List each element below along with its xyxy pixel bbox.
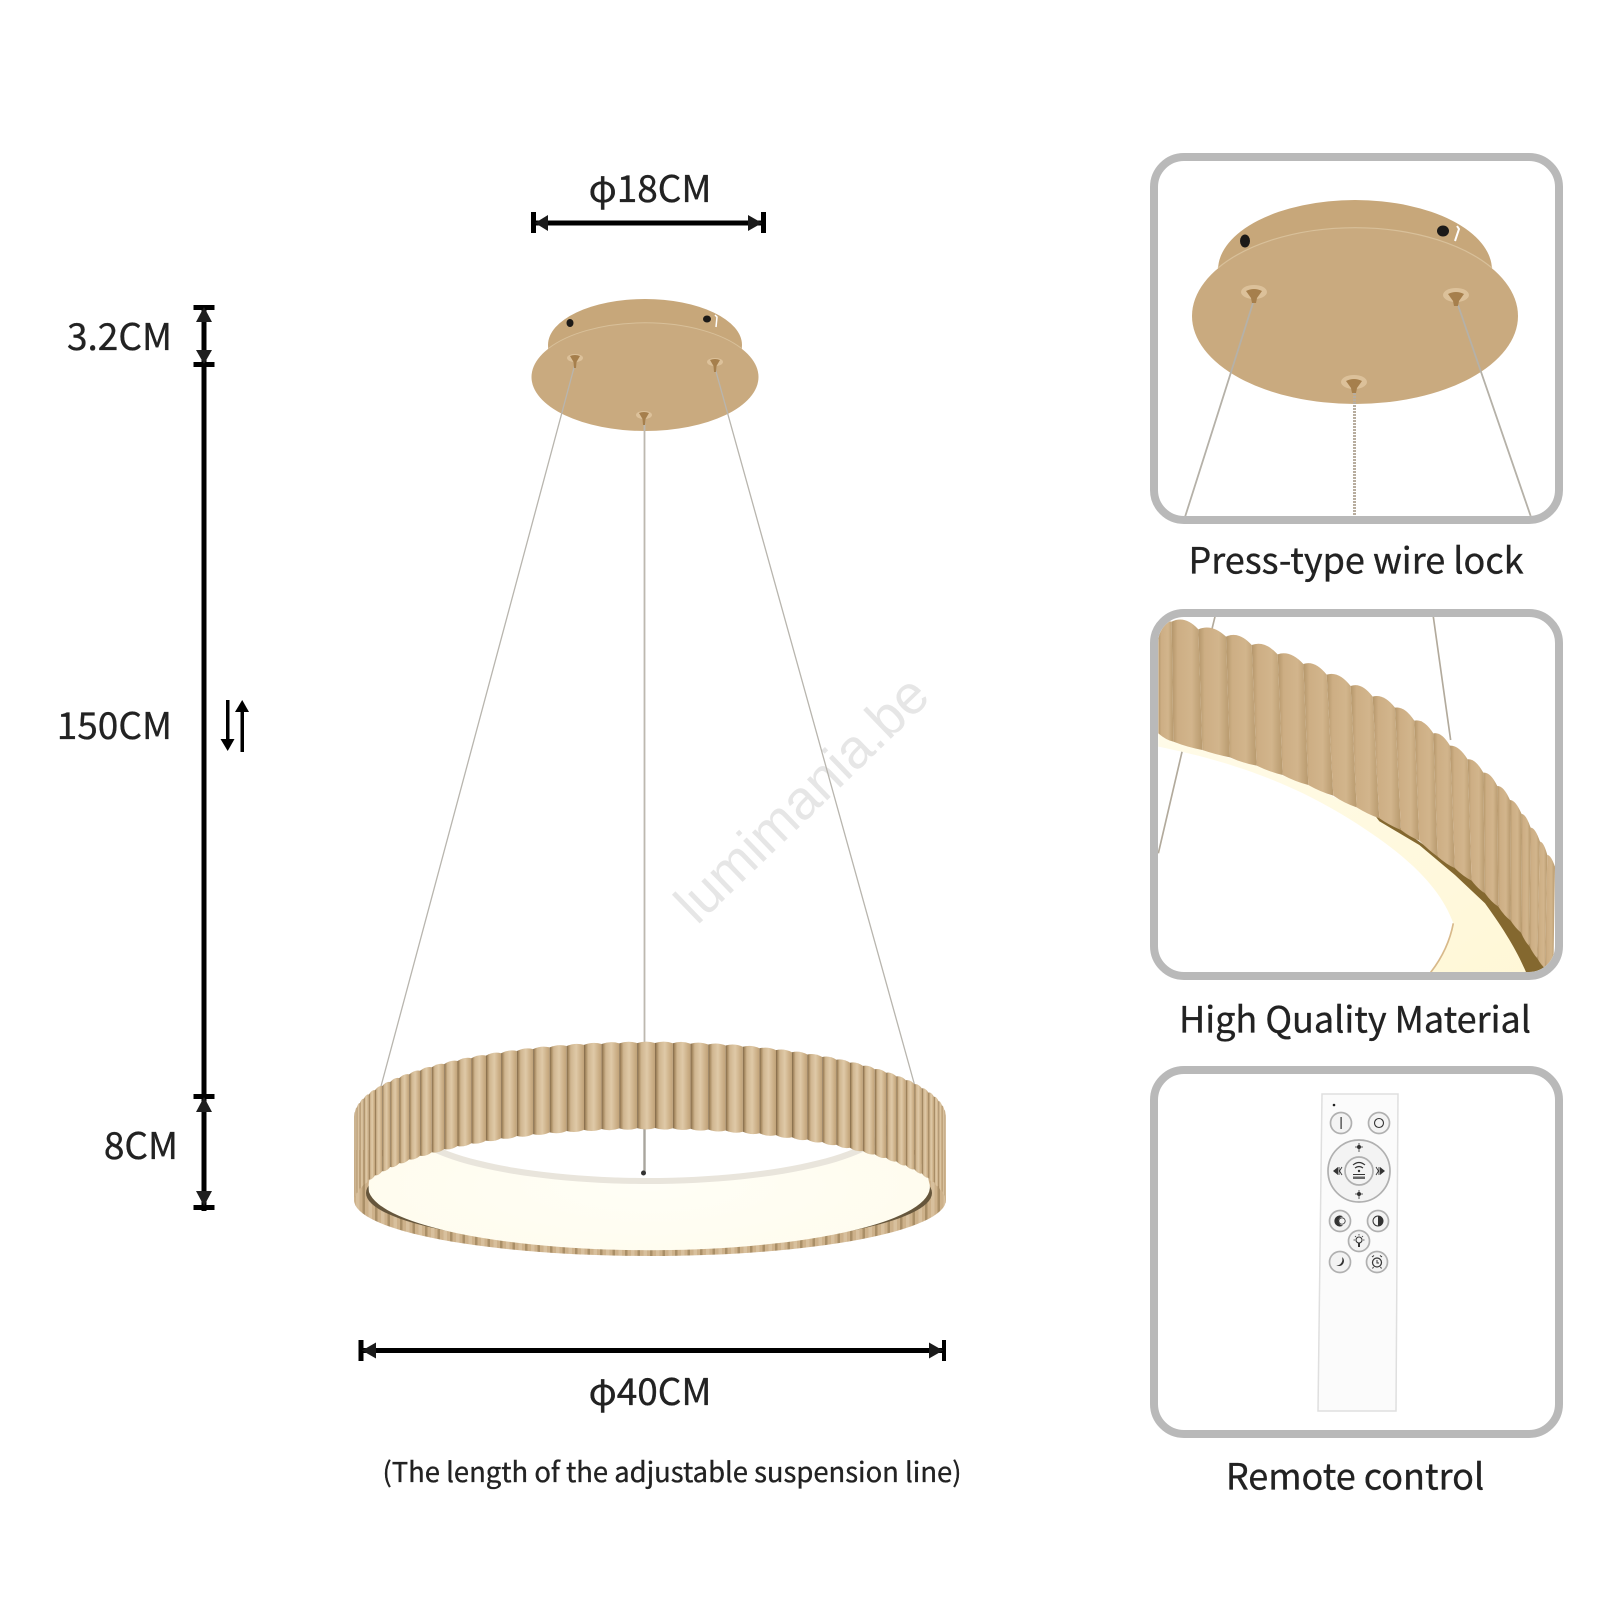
dimension: vertical scale <box>194 305 214 1211</box>
dark inner rim <box>366 1139 932 1247</box>
remote handset <box>1318 1094 1398 1411</box>
watermark: lumimania.be <box>662 663 941 935</box>
label: band height: 8CM <box>104 1116 178 1170</box>
caption: press-type wire lock: Press-type wire lock <box>1188 532 1524 584</box>
icon: adjustable arrows <box>220 700 249 752</box>
close-up canopy <box>1185 200 1531 517</box>
caption: high quality material: High Quality Material <box>1179 992 1531 1044</box>
inner arc and see-through hole <box>404 1058 892 1184</box>
dimension: canopy diameter: φ18CM <box>589 159 711 213</box>
light diffuser disc <box>369 1087 930 1250</box>
label: lamp diameter: φ40CM <box>589 1362 711 1416</box>
dimension: lamp diameter <box>358 1340 946 1361</box>
panel frame <box>1154 157 1559 520</box>
label: canopy height: 3.2CM <box>67 307 172 361</box>
ribbed band <box>354 1042 946 1203</box>
note: suspension line: (The length of the adjustable suspension line) <box>383 1450 961 1490</box>
wire lock pins <box>567 354 723 425</box>
panel: high quality material <box>1154 613 1559 980</box>
close-up ribs <box>1158 617 1555 980</box>
label: suspension length: 150CM <box>57 696 172 750</box>
dimension: canopy diameter <box>531 159 766 233</box>
pendant lamp <box>354 299 946 1256</box>
caption: remote control: Remote control <box>1226 1448 1484 1500</box>
panel: press-type wire lock <box>1154 157 1559 520</box>
ceiling canopy <box>532 299 758 431</box>
front rim ribs <box>354 1150 946 1256</box>
panel: remote control <box>1154 1070 1559 1434</box>
panel frame <box>1154 1070 1559 1434</box>
panel frame <box>1154 613 1559 976</box>
suspension wires <box>380 364 916 1174</box>
